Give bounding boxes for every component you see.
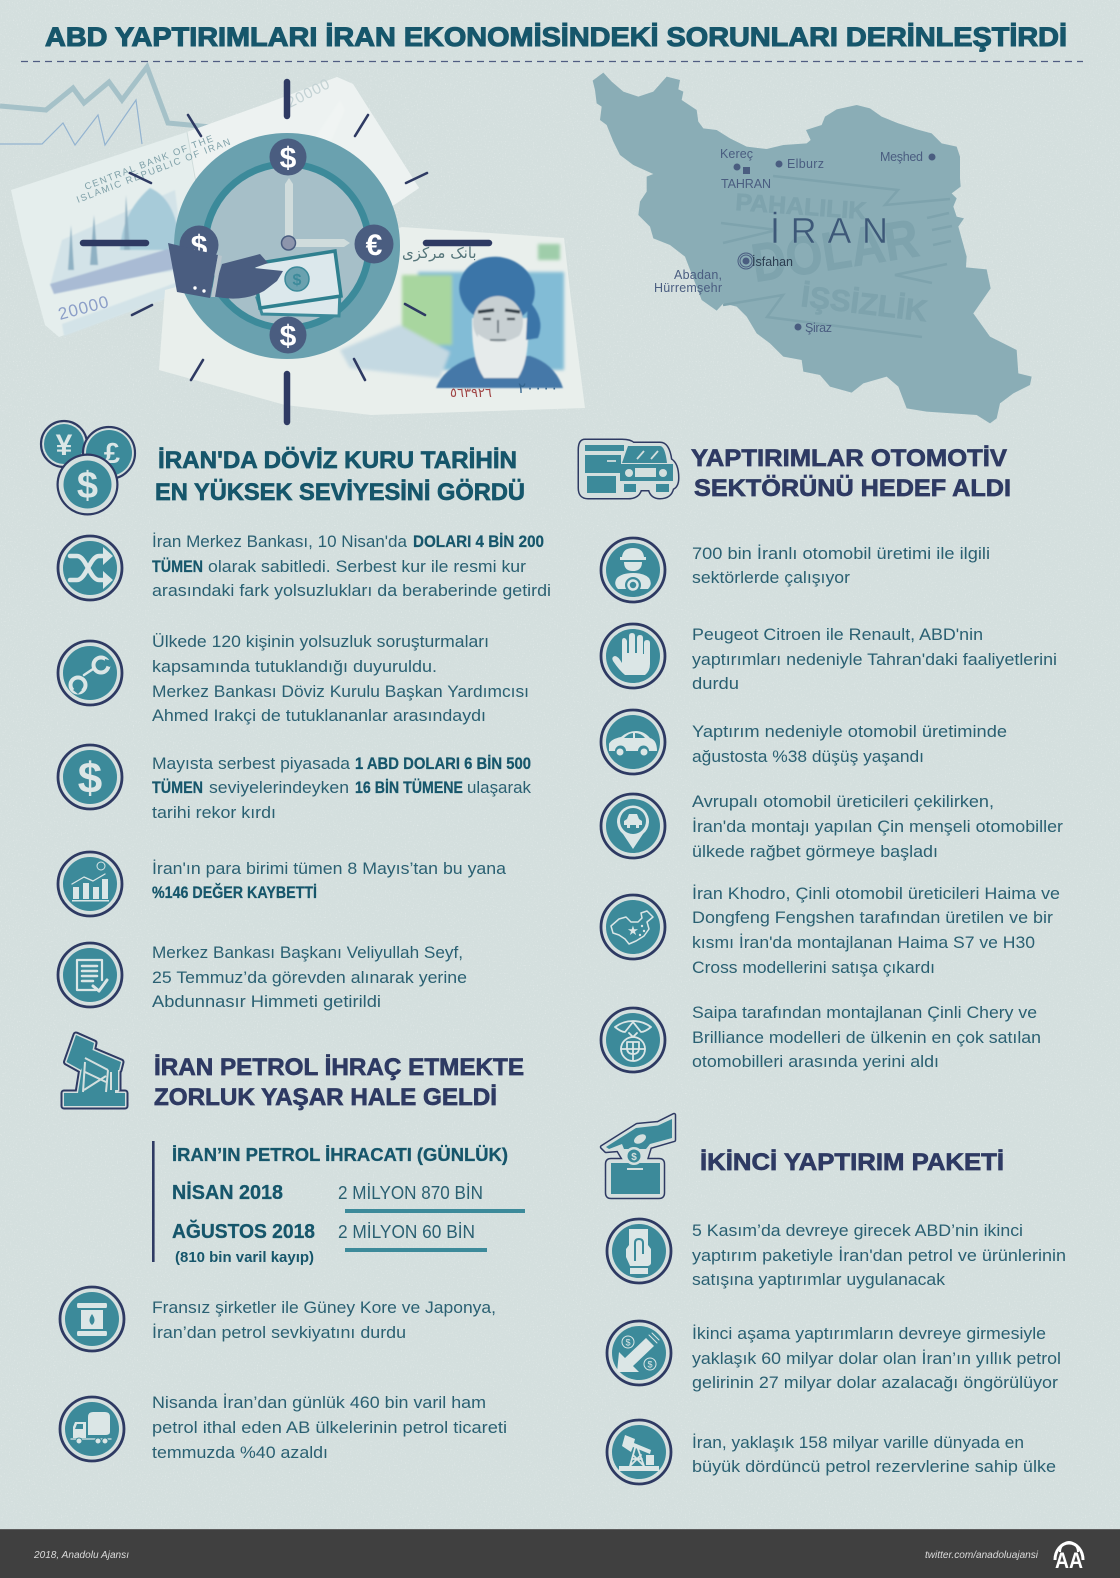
banknote text: bank name in Persian: بانک مرکزی	[402, 244, 477, 262]
city labels: Hürremşehr	[654, 281, 722, 295]
text: corruption arrests: Ülkede 120 kişinin yolsuzluk soruşturmaları	[152, 632, 489, 651]
text: oil reserves: İran, yaklaşık 158 milyar varille dünyada en	[692, 1433, 1024, 1452]
banknote serial and value: ٥٦٣٩٢٦	[450, 386, 492, 401]
currency badges: $	[191, 230, 208, 263]
clock face	[174, 133, 400, 359]
panel: daily oil exports	[152, 1141, 525, 1266]
city labels: İsfahan	[752, 255, 793, 269]
text: Saipa	[692, 1003, 1041, 1071]
text: EU imports fall: Nisanda İran’dan günlük 460 bin varil ham	[152, 1393, 486, 1412]
city labels: Elburz	[787, 157, 824, 171]
city labels: Şiraz	[805, 321, 832, 335]
text: Peugeot and Renault: yaptırımları nedeniyle Tahran'daki faaliyetlerini	[692, 650, 1057, 669]
logo: Anadolu Agency: AA	[1055, 1548, 1083, 1573]
banknotes held in hand	[253, 251, 341, 316]
heading: automotive section: YAPTIRIMLAR OTOMOTİV	[691, 445, 1007, 472]
map watermark words: İŞSİZLİK	[799, 280, 930, 328]
icon: rising bar chart	[58, 852, 122, 916]
currency badges: $	[280, 320, 297, 353]
text: exchange rate fixed: DOLARI 4 BİN 200	[413, 532, 544, 551]
footer	[0, 1529, 1120, 1578]
icon: map of China	[601, 895, 665, 959]
icon: Chery and Brilliance logos	[601, 1008, 665, 1072]
icon: document with check	[58, 943, 122, 1007]
map watermark words: DOLAR	[747, 208, 923, 294]
text: Saipa: otomobilleri arasında yerini aldı	[692, 1052, 939, 1071]
text: dollar record	[152, 754, 531, 822]
row: August 2018: AĞUSTOS 2018	[172, 1219, 315, 1243]
text: Chinese cars: ülkede rağbet görmeye başladı	[692, 842, 938, 861]
text: corruption arrests: kapsamında tutuklandığı duyuruldu.	[152, 657, 437, 676]
text: central bank governor: 25 Temmuz’da görevden alınarak yerine	[152, 968, 467, 987]
banknotes held in hand: $	[293, 272, 302, 289]
text: Peugeot and Renault: durdu	[692, 674, 739, 693]
text: Iran Khodro: kısmı İran'da montajlanan Haima S7 ve H30	[692, 933, 1035, 952]
row: April 2018: NİSAN 2018	[172, 1181, 283, 1204]
icon: cars	[580, 441, 677, 497]
city labels: Kereç	[720, 147, 753, 161]
panel heading: İRAN’IN PETROL İHRACATI (GÜNLÜK)	[172, 1145, 508, 1165]
icon: shuffle arrows	[58, 536, 122, 600]
icon: small pumpjack	[607, 1420, 671, 1484]
text: November 5	[692, 1221, 1066, 1289]
footer twitter: twitter.com/anadoluajansi	[925, 1550, 1039, 1561]
heading: second sanctions package: İKİNCİ YAPTIRIM PAKETİ	[700, 1149, 1004, 1176]
text: shipments halted: İran’dan petrol sevkiyatını durdu	[152, 1323, 406, 1342]
row: August 2018: (810 bin varil kayıp)	[175, 1249, 314, 1266]
icon: map of China: ★	[627, 923, 639, 938]
text: EU imports fall	[152, 1393, 507, 1462]
text: employment: sektörlerde çalışıyor	[692, 568, 850, 587]
text: shipments halted: Fransız şirketler ile Güney Kore ve Japonya,	[152, 1298, 496, 1317]
heading: currency section: EN YÜKSEK SEVİYESİNİ GÖRDÜ	[155, 479, 525, 506]
text: Saipa: Saipa tarafından montajlanan Çinli Chery ve	[692, 1003, 1037, 1022]
currency badges	[180, 138, 394, 354]
text: corruption arrests: Merkez Bankası Döviz Kurulu Başkan Yardımcısı	[152, 682, 529, 701]
icon: currency coins: $	[77, 465, 98, 507]
text: production drop	[692, 722, 1007, 766]
heading: oil section: ZORLUK YAŞAR HALE GELDİ	[154, 1084, 497, 1111]
icon: car	[601, 710, 665, 774]
text: Chinese cars: Avrupalı otomobil üreticileri çekilirken,	[692, 792, 994, 811]
city labels	[654, 147, 936, 335]
text: dollar record: 1 ABD DOLARI 6 BİN 500	[355, 754, 531, 773]
city labels: Meşhed	[880, 150, 923, 164]
icon: falling arrow with coins	[607, 1321, 671, 1385]
text: toman value loss: İran'ın para birimi tümen 8 Mayıs’tan bu yana	[152, 859, 507, 878]
text: employment	[692, 544, 990, 587]
text: exchange rate fixed: arasındaki fark yolsuzlukları da beraberinde getirdi	[152, 581, 551, 600]
text: Iran Khodro: Cross modellerini satışa çıkardı	[692, 958, 935, 977]
heading: automotive section: SEKTÖRÜNÜ HEDEF ALDI	[694, 475, 1011, 502]
text: Peugeot and Renault: Peugeot Citroen ile Renault, ABD'nin	[692, 625, 983, 644]
hand with cuff	[168, 243, 283, 299]
footer credit: 2018, Anadolu Ajansı	[33, 1550, 129, 1561]
text: Peugeot and Renault	[692, 625, 1057, 693]
icon: falling arrow with coins: $	[625, 1338, 631, 1348]
city labels: Abadan,	[674, 268, 722, 282]
row: August 2018: 2 MİLYON 60 BİN	[338, 1222, 475, 1242]
row: April 2018	[172, 1181, 525, 1213]
text: exchange rate fixed	[152, 532, 551, 600]
row: August 2018	[172, 1219, 487, 1266]
banknote: Khomeini portrait note	[159, 227, 585, 415]
text: central bank governor: Abdunnasır Himmeti getirildi	[152, 992, 381, 1011]
text: toman value loss: %146 DEĞER KAYBETTİ	[152, 883, 317, 902]
icon: currency coins: ¥	[56, 429, 73, 462]
currency badges: $	[280, 142, 297, 175]
text: dollar record: 16 BİN TÜMENE	[355, 778, 463, 797]
text: production drop: Yaptırım nedeniyle otomobil üretiminde	[692, 722, 1007, 741]
text: oil reserves	[692, 1433, 1056, 1476]
map watermark words	[721, 176, 952, 337]
text: exchange rate fixed: olarak sabitledi. Serbest kur ile resmi kur	[208, 557, 526, 576]
text: EU imports fall: petrol ithal eden AB ülkelerinin petrol ticareti	[152, 1418, 507, 1437]
heading: oil section: İRAN PETROL İHRAÇ ETMEKTE	[154, 1054, 524, 1081]
icon: oil pumpjack	[64, 1035, 125, 1106]
icon: oil barrel	[60, 1287, 124, 1351]
text: oil reserves: büyük dördüncü petrol rezervlerine sahip ülke	[692, 1457, 1056, 1476]
text: Iran Khodro	[692, 884, 1060, 977]
banknote text: bank name: CENTRAL BANK OF THE	[83, 133, 216, 193]
text: Chinese cars	[692, 792, 1063, 861]
icon: finger on card	[607, 1219, 671, 1283]
text: dollar record: TÜMEN	[152, 778, 203, 797]
currency badges: €	[366, 229, 383, 262]
icon: dollar	[58, 745, 122, 809]
text: EU imports fall: temmuzda %40 azaldı	[152, 1443, 328, 1462]
text: November 5: satışına yaptırımlar uygulanacak	[692, 1270, 946, 1289]
text: November 5: yaptırım paketiyle İran'dan petrol ve ürünlerinin	[692, 1246, 1066, 1265]
map watermark words: PAHALILIK	[735, 189, 868, 225]
text: employment: 700 bin İranlı otomobil üretimi ile ilgili	[692, 544, 990, 563]
text: dollar record: seviyelerindeyken	[209, 778, 349, 797]
text: Iran Khodro: İran Khodro, Çinli otomobil üreticileri Haima ve	[692, 884, 1060, 903]
text: toman value loss	[152, 859, 507, 902]
text: revenue decline: yaklaşık 60 milyar dolar olan İran’ın yıllık petrol	[692, 1349, 1061, 1368]
text: shipments halted	[152, 1298, 496, 1342]
text: central bank governor: Merkez Bankası Başkanı Veliyullah Seyf,	[152, 943, 463, 962]
icon: currency coins: £	[104, 438, 120, 470]
banknote: twenty thousand rial, folded left note	[11, 75, 419, 337]
text: revenue decline: gelirinin 27 milyar dolar azalacağı öngörülüyor	[692, 1373, 1058, 1392]
heading: automotive section	[691, 445, 1011, 502]
clock hands	[282, 178, 350, 250]
clock rays	[83, 82, 489, 422]
row: April 2018: 2 MİLYON 870 BİN	[338, 1183, 483, 1203]
banknote text: bank name: ISLAMIC REPUBLIC OF IRAN	[75, 136, 233, 206]
city labels: TAHRAN	[721, 177, 771, 191]
icon: dollar: $	[78, 754, 102, 803]
icon: falling arrow with coins: $	[647, 1360, 653, 1370]
heading: oil section	[154, 1054, 524, 1111]
icon: tanker truck	[60, 1397, 124, 1461]
text: production drop: ağustosta %38 düşüş yaşandı	[692, 747, 924, 766]
heading: currency section	[155, 447, 525, 506]
text: dollar record: ulaşarak	[467, 778, 531, 797]
text: revenue decline: İkinci aşama yaptırımların devreye girmesiyle	[692, 1324, 1046, 1343]
text: revenue decline	[692, 1324, 1061, 1392]
text: corruption arrests: Ahmed Irakçi de tutuklananlar arasındaydı	[152, 706, 486, 725]
icon: raised hand	[601, 624, 665, 688]
icon: worker with helmet and gear	[601, 538, 665, 602]
text: exchange rate fixed: İran Merkez Bankası, 10 Nisan'da	[152, 532, 408, 551]
title: ABD YAPTIRIMLARI İRAN EKONOMİSİNDEKİ SORUNLARI DERİNLEŞTİRDİ	[45, 22, 1067, 52]
text: Saipa: Brilliance modelleri de ülkenin en çok satılan	[692, 1028, 1041, 1047]
icon: hand dropping coin into box	[602, 1115, 674, 1197]
icon: currency coins	[41, 421, 135, 516]
banknote text: denomination: 20000	[56, 292, 112, 324]
icon: hand dropping coin into box: $	[631, 1152, 637, 1163]
icon: handcuffs	[58, 641, 122, 705]
text: central bank governor	[152, 943, 467, 1011]
icon: location pin with car	[601, 794, 665, 858]
banknote: twenty thousand rial, folded left note: 20000	[284, 75, 333, 112]
text: dollar record: tarihi rekor kırdı	[152, 803, 276, 822]
banknote: Khomeini portrait note: ٢٠٠٠٠	[518, 379, 558, 397]
country name: İRAN	[770, 210, 888, 251]
text: Chinese cars: İran'da montajı yapılan Çin menşeli otomobiller	[692, 817, 1063, 836]
text: Iran Khodro: Dongfeng Fengshen tarafından üretilen ve bir	[692, 908, 1053, 927]
heading: currency section: İRAN'DA DÖVİZ KURU TARİHİN	[158, 447, 517, 474]
text: corruption arrests	[152, 632, 529, 725]
clock illustration	[83, 82, 489, 422]
text: dollar record: Mayısta serbest piyasada	[152, 754, 351, 773]
map of Iran	[593, 73, 1032, 423]
chart lines decoration	[0, 67, 275, 145]
text: exchange rate fixed: TÜMEN	[152, 557, 203, 576]
text: November 5: 5 Kasım’da devreye girecek ABD’nin ikinci	[692, 1221, 1023, 1240]
